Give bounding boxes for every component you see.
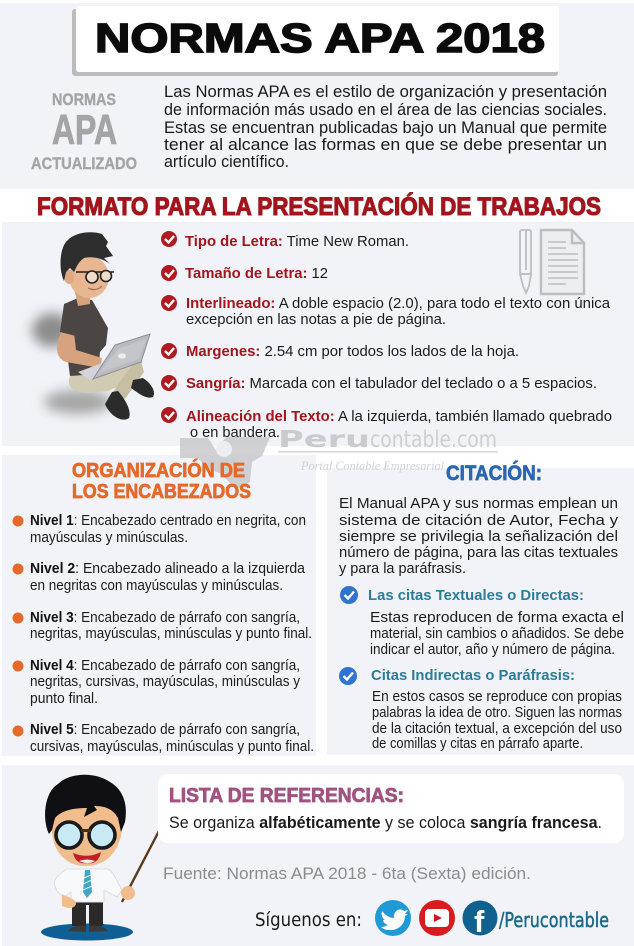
source note: Fuente: Normas APA 2018 - 6ta (Sexta) edición. — [163, 864, 531, 883]
heading: organización de los encabezados: LOS ENCABEZADOS — [72, 481, 251, 503]
item: interlineado: Interlineado: A doble espacio (2.0), para todo el texto con única — [186, 295, 611, 312]
text block: manual APA — [339, 495, 618, 577]
item: nivel 5: Nivel 5: Encabezado de párrafo con sangría, — [30, 722, 300, 738]
intro text block: artículo científico. — [164, 152, 289, 171]
intro text block: tener al alcance las formas en que se debe presentar un — [164, 135, 607, 154]
badge: Normas APA actualizado: APA — [52, 106, 117, 153]
text block: manual APA: El Manual APA y sus normas emplean un — [339, 495, 618, 512]
callout: lista de referencias: Se organiza alfabéticamente y se coloca sangría francesa. — [169, 814, 602, 832]
panel: organización de los encabezados — [2, 455, 316, 756]
badge: Normas APA actualizado — [31, 91, 137, 173]
badge: Normas APA actualizado: ACTUALIZADO — [31, 154, 137, 173]
intro text block — [164, 82, 607, 171]
intro text block: de información más usado en el área de las ciencias sociales. — [164, 100, 607, 119]
heading: citación: CITACIÓN: — [446, 461, 542, 485]
item: tipo de letra: Tipo de Letra: Time New Roman. — [185, 233, 409, 250]
watermark: Perucontable: contable.com — [370, 427, 497, 453]
item: interlineado: excepción en las notas a pie de página. — [186, 311, 446, 328]
intro text block: Estas se encuentran publicadas bajo un Manual que permite — [164, 118, 607, 137]
illustration: teacher cartoon — [41, 775, 160, 940]
item: alineacion: o en bandera. — [190, 424, 280, 441]
icon: document — [541, 230, 584, 294]
heading: organización de los encabezados — [72, 458, 251, 503]
watermark: Perucontable: Peru — [278, 427, 370, 453]
item: nivel 1 — [12, 513, 306, 546]
follow label: Síguenos en: — [255, 909, 362, 931]
item: alineacion: Alineación del Texto: A la izquierda, también llamado quebrado — [186, 408, 612, 425]
watermark: Perucontable: Portal Contable Empresarial — [300, 458, 444, 473]
block: citas indirectas — [339, 667, 622, 752]
item: margenes: Margenes: 2.54 cm por todos los lados de la hoja. — [186, 343, 519, 360]
item: nivel 2: Nivel 2: Encabezado alineado a la izquierda — [30, 561, 306, 577]
panel: top intro background — [0, 3, 634, 189]
item: nivel 5 — [12, 722, 314, 755]
item: nivel 1: Nivel 1: Encabezado centrado en negrita, con — [30, 513, 306, 529]
item: nivel 4: punto final. — [30, 691, 98, 707]
panel: bottom background — [2, 765, 634, 946]
item: nivel 2: en negritas con mayúsculas y minúsculas. — [30, 578, 283, 594]
block: citas indirectas: de comillas y citas en párrafo aparte. — [372, 735, 583, 752]
heading: organización de los encabezados: ORGANIZACIÓN DE — [72, 458, 245, 482]
block: citas textuales — [340, 586, 624, 658]
icon: facebook — [462, 900, 498, 939]
title card: NORMAS APA 2018 — [95, 15, 545, 61]
social handle: /Perucontable — [499, 908, 609, 932]
text block: manual APA: sistema de citación de Autor, Fecha y — [339, 512, 618, 529]
list: formato de trabajos — [161, 231, 612, 441]
item: tamaño de letra: Tamaño de Letra: 12 — [185, 265, 328, 282]
block: citas textuales: Las citas Textuales o Directas: — [368, 587, 584, 604]
text block: manual APA: siempre se privilegia la señalización del — [339, 528, 618, 545]
icon: facebook: f — [474, 904, 485, 939]
item: alineacion — [161, 407, 612, 441]
item: interlineado — [161, 295, 611, 328]
item: sangria: Sangría: Marcada con el tabulador del teclado o a 5 espacios. — [186, 375, 597, 392]
watermark: Perucontable — [180, 427, 498, 490]
text block: manual APA: y para la paráfrasis. — [339, 560, 466, 577]
illustration: man with laptop — [32, 232, 154, 420]
item: nivel 4 — [12, 658, 301, 707]
callout: lista de referencias: LISTA DE REFERENCIAS: — [169, 784, 404, 807]
block: citas textuales: Estas reproducen de forma exacta el — [370, 609, 624, 626]
title card — [72, 6, 559, 76]
block: citas indirectas: Citas Indirectas o Paráfrasis: — [371, 667, 575, 684]
icon: twitter — [375, 900, 411, 936]
item: nivel 5: cursivas, mayúsculas, minúsculas y punto final. — [30, 739, 314, 755]
badge: Normas APA actualizado: NORMAS — [52, 91, 116, 109]
icon: youtube — [419, 900, 455, 936]
panel: formato background — [2, 222, 634, 446]
item: nivel 2 — [12, 561, 306, 594]
item: nivel 3 — [12, 610, 312, 642]
item: nivel 4: Nivel 4: Encabezado de párrafo con sangría, — [30, 658, 300, 674]
intro text block: Las Normas APA es el estilo de organización y presentación — [164, 82, 607, 101]
text block: manual APA: número de página, para las citas textuales — [339, 544, 618, 561]
item: nivel 1: mayúsculas y minúsculas. — [30, 530, 188, 546]
item: nivel 4: negritas, cursivas, mayúsculas, minúsculas y — [30, 674, 301, 690]
item: nivel 3: negritas, mayúsculas, minúsculas y punto final. — [30, 626, 312, 642]
item: nivel 3: Nivel 3: Encabezado de párrafo con sangría, — [30, 610, 300, 626]
callout: lista de referencias — [158, 774, 624, 843]
icon: pen — [520, 230, 531, 293]
list: niveles — [12, 513, 314, 755]
panel: citación — [327, 468, 634, 755]
